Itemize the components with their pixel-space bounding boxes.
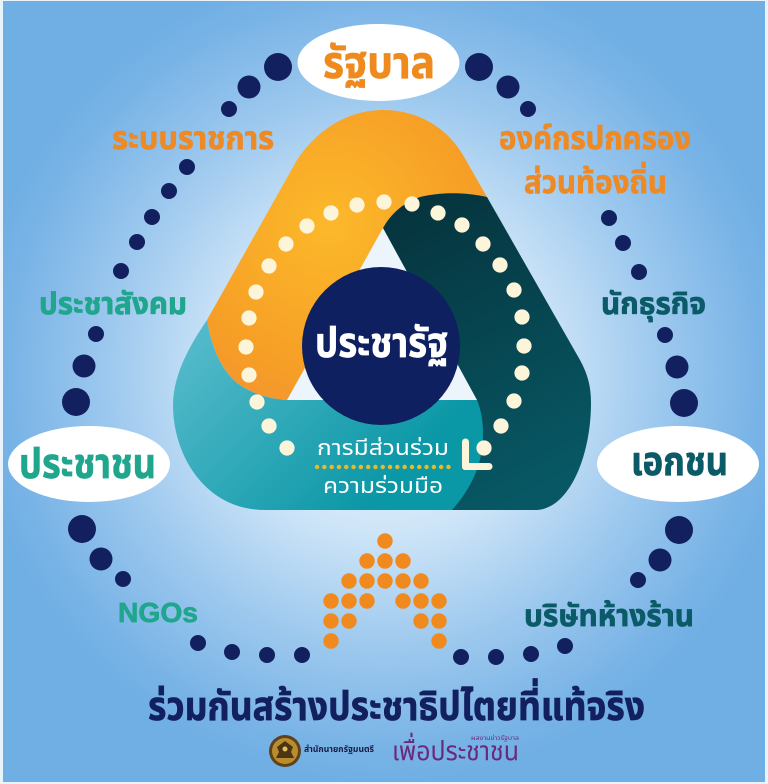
cream dotted ring	[238, 194, 532, 456]
for the people logotype: ผลงานข่าวรัฐบาล	[471, 735, 519, 742]
band: dark teal	[383, 193, 591, 510]
label: bureaucracy: ระบบราชการ	[112, 120, 274, 156]
band: orange	[207, 110, 487, 400]
for the people logotype: เพื่อประชาชน	[392, 732, 519, 766]
label: people: ประชาชน	[19, 440, 156, 487]
label: government	[298, 24, 460, 101]
label: government: รัฐบาล	[323, 39, 435, 88]
arrow head	[462, 439, 493, 470]
band: teal	[173, 320, 483, 510]
label: people	[8, 426, 170, 502]
label: civil society: ประชาสังคม	[39, 288, 187, 321]
cooperation label: ความร่วมมือ	[323, 474, 443, 498]
centre label: ประชารัฐ	[315, 319, 448, 366]
label: private sector	[597, 426, 759, 502]
label: business: นักธุรกิจ	[601, 288, 706, 322]
upward arrow of orange dots	[323, 533, 447, 649]
label: companies and shops: บริษัทห้างร้าน	[524, 600, 694, 633]
central triangle diagram	[173, 110, 591, 510]
gold dotted divider	[317, 465, 454, 469]
label: local government	[499, 120, 691, 200]
participation label: การมีส่วนร่วม	[317, 436, 449, 460]
centre circle	[302, 267, 460, 425]
slogan: ร่วมกันสร้างประชาธิปไตยที่แท้จริง	[148, 678, 645, 729]
label: local government: ส่วนท้องถิ่น	[524, 161, 667, 200]
inner triangle	[287, 228, 477, 400]
label: private sector: เอกชน	[631, 440, 728, 484]
office name: สำนักนายกรัฐมนตรี	[304, 744, 374, 754]
label: local government: องค์กรปกครอง	[499, 120, 691, 156]
outer ring of navy dots	[62, 53, 698, 665]
label: NGOs: NGOs	[118, 597, 198, 628]
icon: government emblem	[269, 735, 301, 767]
